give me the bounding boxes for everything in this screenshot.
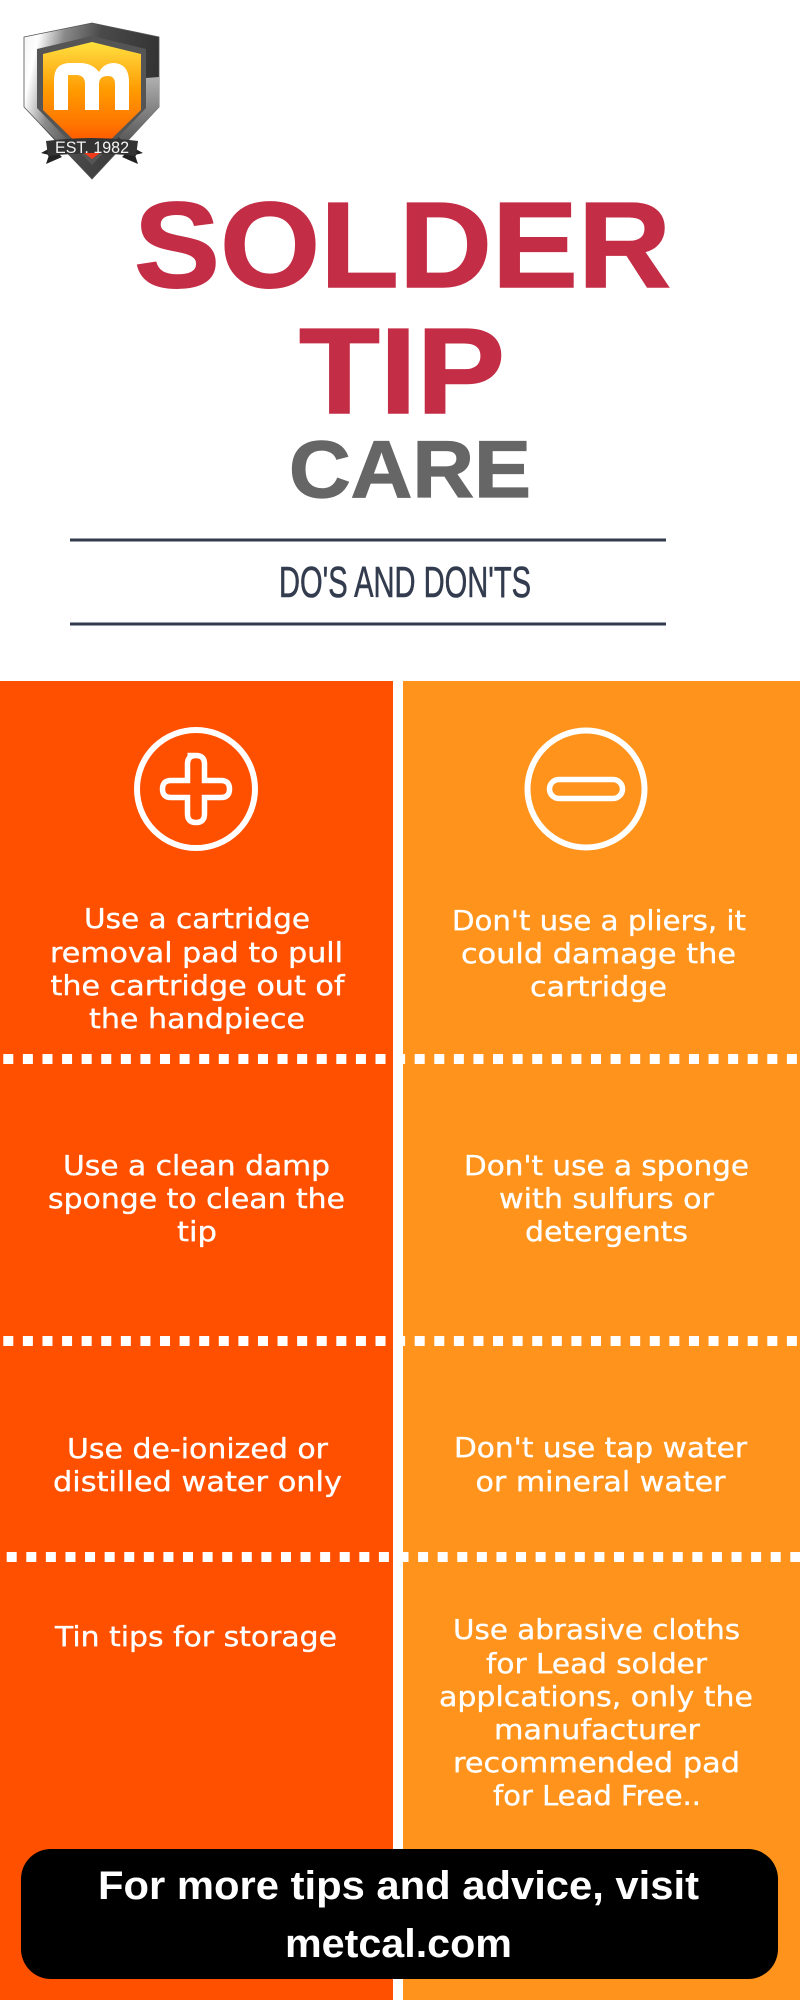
text: clean damp sponge bbox=[48, 1150, 345, 1248]
text: abrasive cloths: for Lead solder bbox=[486, 1648, 708, 1680]
panel: do's column bbox=[0, 681, 393, 2000]
icon: plus in circle bbox=[137, 730, 255, 848]
text: sponge: Don't use a sponge bbox=[464, 1150, 749, 1182]
text: sponge bbox=[464, 1150, 749, 1248]
callout: visit metcal.com: For more tips and advice, visit bbox=[98, 1864, 699, 1908]
text: cartridge removal pad: removal pad to pull bbox=[50, 937, 343, 969]
heading: do's and don'ts with rules: DO'S AND DON'TS bbox=[279, 558, 531, 607]
ribbon text: EST. 1982 bbox=[55, 138, 129, 157]
text: tin tips: Tin tips for storage bbox=[54, 1621, 337, 1653]
ribbon bbox=[41, 138, 143, 164]
text: abrasive cloths: recommended pad bbox=[453, 1747, 740, 1779]
text: tap water: or mineral water bbox=[476, 1466, 726, 1498]
dotted dividers bbox=[3, 1059, 800, 1557]
text: cartridge removal pad: the cartridge out of bbox=[50, 970, 346, 1002]
text: abrasive cloths bbox=[439, 1614, 753, 1812]
text: cartridge removal pad bbox=[50, 903, 346, 1035]
title: SOLDER TIP: TIP bbox=[299, 303, 505, 439]
text: abrasive cloths: manufacturer bbox=[494, 1714, 701, 1746]
icon: minus in circle bbox=[528, 730, 644, 848]
callout: visit metcal.com: metcal.com bbox=[285, 1922, 512, 1966]
letter m bbox=[54, 63, 129, 110]
shield outer rim bbox=[24, 23, 159, 179]
text: sponge: detergents bbox=[525, 1216, 688, 1248]
text: pliers: Don't use a pliers, it bbox=[452, 905, 746, 937]
text: abrasive cloths: applcations, only the bbox=[439, 1681, 753, 1713]
shield orange fill bbox=[43, 42, 141, 158]
text: pliers: cartridge bbox=[530, 971, 667, 1003]
text: clean damp sponge: tip bbox=[177, 1216, 217, 1248]
text: cartridge removal pad: Use a cartridge bbox=[84, 903, 310, 935]
shield inner dark band bbox=[37, 36, 146, 165]
text: abrasive cloths: Use abrasive cloths bbox=[453, 1614, 740, 1646]
text: pliers: could damage the bbox=[461, 938, 736, 970]
text: pliers bbox=[452, 905, 746, 1003]
heading: do's and don'ts with rules bbox=[70, 538, 666, 626]
text: abrasive cloths: for Lead Free.. bbox=[493, 1780, 701, 1812]
text: clean damp sponge: Use a clean damp bbox=[63, 1150, 330, 1182]
text: clean damp sponge: sponge to clean the bbox=[48, 1183, 345, 1215]
title: SOLDER TIP: SOLDER bbox=[134, 177, 671, 313]
text: de-ionized water: Use de-ionized or bbox=[67, 1433, 329, 1465]
text: de-ionized water bbox=[53, 1433, 342, 1498]
logo: Metcal shield bbox=[24, 23, 159, 179]
text: tap water: Don't use tap water bbox=[454, 1432, 748, 1464]
panel: don'ts column bbox=[403, 681, 800, 2000]
text: cartridge removal pad: the handpiece bbox=[89, 1003, 305, 1035]
callout: visit metcal.com bbox=[21, 1849, 778, 1979]
text: sponge: with sulfurs or bbox=[499, 1183, 715, 1215]
text: tap water bbox=[454, 1432, 748, 1498]
title: SOLDER TIP bbox=[134, 177, 671, 439]
text: de-ionized water: distilled water only bbox=[53, 1466, 342, 1498]
subtitle: CARE: CARE bbox=[289, 425, 531, 515]
